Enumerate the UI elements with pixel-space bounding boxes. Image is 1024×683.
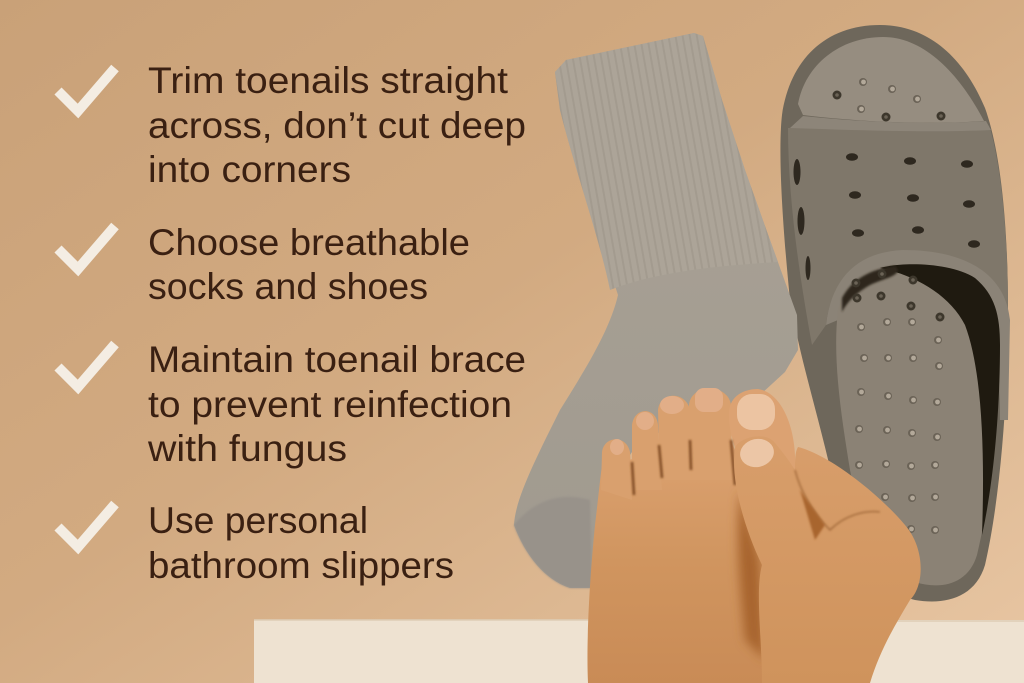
slipper toe bed [798,37,984,123]
item 2 text [148,222,470,307]
item 4 text: bathroom slippers [148,545,454,586]
item 1 text: into corners [148,149,351,190]
item 3 text: with fungus [147,428,347,469]
check 3 [58,344,115,387]
toenails [610,388,775,455]
sock ribbed cuff [555,33,778,290]
toe gaps [632,440,735,495]
check 1 [58,68,115,111]
slipper strap and toe holes [794,78,980,280]
slipper pegs [852,270,944,534]
check 4 [58,504,115,547]
hand [734,436,921,683]
slipper dark interior [880,264,1000,535]
foot side shadow [738,490,765,660]
towel [254,620,1024,683]
checklist [58,60,526,586]
item 2 text: socks and shoes [148,266,428,307]
item 4 text: Use personal [148,500,368,541]
slipper insole [836,264,1000,585]
hand creases [795,470,880,530]
foot [587,388,795,683]
item 1 text: across, don’t cut deep [148,105,526,146]
sock toe [514,497,592,588]
sock [514,33,798,588]
item 1 text: Trim toenails straight [148,60,509,101]
item 2 text: Choose breathable [148,222,470,263]
item 3 text: Maintain toenail brace [148,339,526,380]
slipper strap [788,127,1008,345]
item 4 text [148,500,454,586]
toes [601,388,732,500]
finger curl shadow [800,490,825,540]
item 3 text [147,339,526,469]
item 1 text [148,60,526,190]
slipper opening rim [826,250,1010,420]
item 3 text: to prevent reinfection [148,384,512,425]
check 2 [58,226,115,269]
thumb nail [737,436,777,470]
slipper [780,25,1010,601]
big toe [729,389,795,480]
